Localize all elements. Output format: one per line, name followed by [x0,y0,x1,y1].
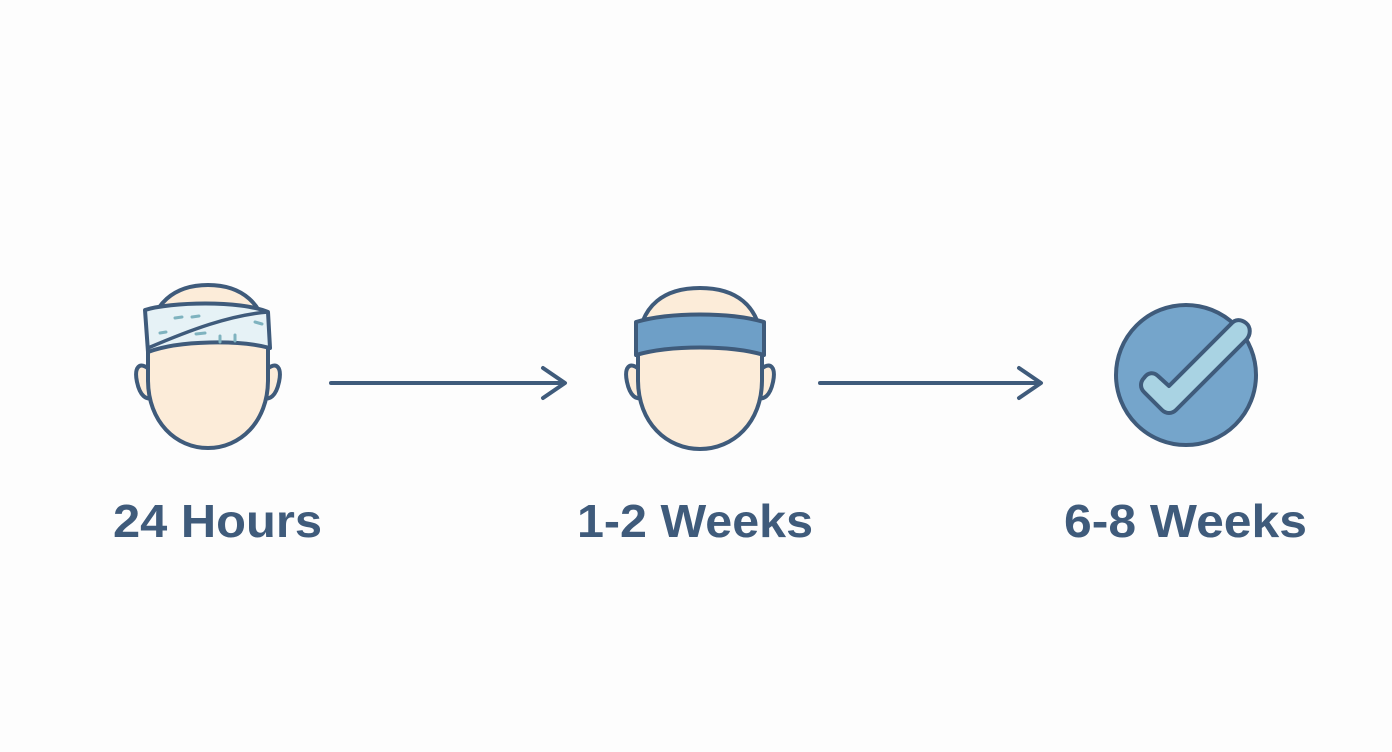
label: 1-2 Weeks: 1-2 Weeks [577,495,813,547]
arrow 1 [331,368,565,398]
arrow 2 [820,368,1041,398]
stage 3: 6-8 weeks [1064,305,1307,547]
icon: head with headband [626,288,774,449]
stage 2: 1-2 weeks [577,288,813,547]
stage 1: 24 hours [113,285,322,547]
label: 6-8 Weeks: 6-8 Weeks [1064,495,1307,547]
label: 24 Hours: 24 Hours [113,495,322,547]
icon: bandaged head [136,285,280,448]
icon: check circle [1116,305,1256,445]
